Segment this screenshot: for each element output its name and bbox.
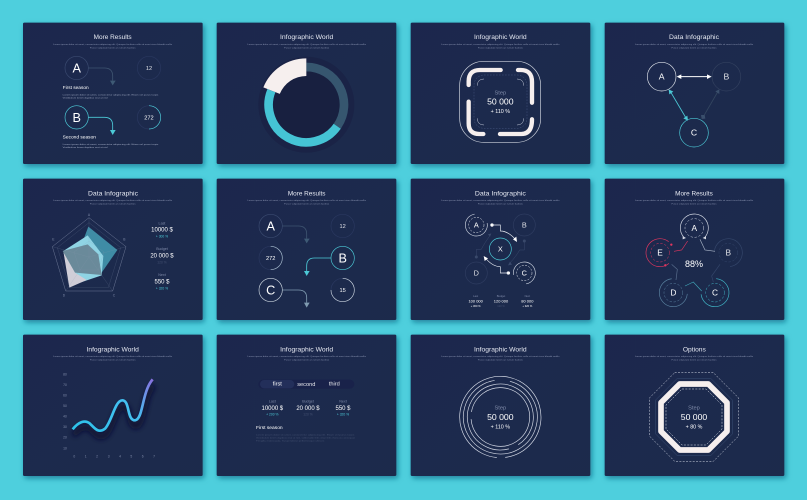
heading: Options — [683, 346, 706, 353]
heading: Infographic World — [474, 34, 527, 41]
heading: Infographic World — [86, 346, 139, 353]
node E — [640, 233, 680, 272]
value 272: 272 — [144, 115, 154, 121]
node X: X — [498, 245, 503, 254]
radar chart: B — [123, 238, 126, 242]
radar chart: A — [88, 213, 91, 217]
intro text: Fusce vulputate lorem an rutrum facilisis — [284, 46, 329, 49]
node A — [65, 56, 88, 80]
intro text: Fusce vulputate lorem an rutrum facilisis — [478, 358, 523, 361]
stat: Next: + 320 % — [522, 304, 533, 308]
intro text: Lorem ipsum dolor sit amet, consectetur adipiscing elit. Quisque facilisis nulla sit amet risus blandit mollis — [441, 355, 559, 358]
y axis labels: 70 — [63, 383, 67, 387]
value 12 — [331, 214, 354, 238]
x axis labels: 4 — [119, 455, 121, 459]
heading: Data Infographic — [475, 190, 526, 197]
y axis labels — [63, 373, 67, 450]
value 12 — [137, 56, 161, 80]
node C — [259, 278, 282, 302]
second season text — [63, 135, 158, 149]
panel: triangle ABC network — [605, 23, 784, 164]
gauge values — [681, 406, 707, 430]
node B: B — [72, 111, 81, 125]
node B — [65, 106, 88, 129]
radar chart — [52, 213, 126, 298]
panel: rounded square gauge — [411, 23, 590, 164]
node B — [513, 214, 535, 236]
heading: More Results — [675, 190, 713, 197]
first season text — [63, 85, 158, 100]
stat: Last: Last — [473, 294, 478, 298]
stat: Next: 550 $ — [336, 406, 351, 412]
stat: Budget: 20 000 $ — [150, 253, 174, 259]
intro text — [441, 355, 559, 361]
stat: Next: 80 000 — [521, 299, 534, 304]
first season text: Vestibulum lorem dapibus erat at nisl — [63, 97, 108, 100]
stat: Last: 100 000 — [468, 299, 484, 304]
intro text — [53, 355, 172, 361]
stat: Budget — [494, 294, 509, 308]
node C — [680, 118, 708, 147]
intro text — [53, 199, 172, 205]
value 272: 272 — [266, 256, 275, 262]
first season text: Vestibulum lorem dapibus erat at nisl, sollicitudin felis vitae felis rhoncus consequat — [256, 436, 355, 439]
node A: A — [659, 72, 665, 82]
first season text — [256, 425, 355, 443]
heading: More Results — [288, 190, 325, 197]
tabs: third — [329, 382, 340, 388]
arrow C-B — [701, 89, 719, 119]
gauge values: Step — [495, 406, 506, 412]
arrow A-B — [677, 74, 712, 79]
node X — [489, 238, 511, 260]
value 272 — [137, 106, 161, 129]
panel: concentric rings — [411, 335, 590, 476]
gauge values: + 110 % — [491, 424, 510, 430]
gauge values — [487, 90, 514, 115]
intro text: Lorem ipsum dolor sit amet, consectetur adipiscing elit. Quisque facilisis nulla sit amet risus blandit mollis — [247, 355, 366, 358]
stat: Budget — [150, 247, 174, 264]
stat: Last — [262, 400, 284, 417]
gauge values — [487, 406, 514, 430]
gauge values: 50 000 — [487, 97, 514, 107]
arrow from A — [282, 226, 310, 243]
stat: Next: Next — [525, 294, 530, 298]
first season text: Lorem ipsum dolor sit amet, consectetur adipiscing elit. Etiam vel purus turpis — [63, 94, 158, 97]
y axis labels: 10 — [63, 446, 67, 450]
stat: Last: + 300 % — [471, 304, 481, 308]
intro text: Fusce vulputate lorem an rutrum facilisis — [478, 202, 523, 205]
panel: X hub diagram — [411, 179, 590, 320]
heading: Data Infographic — [669, 34, 719, 41]
node A — [647, 62, 676, 91]
arrow from B — [304, 258, 331, 276]
intro text: Fusce vulputate lorem an rutrum facilisis — [671, 46, 716, 49]
intro text — [441, 199, 559, 205]
stat: Budget: 20 000 $ — [296, 406, 320, 412]
x axis labels: 2 — [96, 455, 98, 459]
x axis labels: 3 — [108, 455, 110, 459]
node C: C — [691, 128, 697, 138]
intro text: Fusce vulputate lorem an rutrum facilisis — [478, 46, 523, 49]
panel: line chart — [23, 335, 203, 476]
tabs: first — [273, 382, 282, 388]
gauge values: 50 000 — [487, 412, 514, 422]
value 15: 15 — [340, 288, 346, 294]
tabs — [258, 380, 354, 389]
heading: More Results — [94, 34, 132, 41]
gauge — [460, 61, 541, 142]
stat: Budget: 120 000 — [494, 299, 509, 304]
second season text: Second season — [63, 135, 96, 140]
stat: Next: Next — [158, 273, 166, 277]
stat: Last: 10000 $ — [262, 406, 284, 412]
gauge values: 50 000 — [681, 412, 707, 422]
intro text: Lorem ipsum dolor sit amet, consectetur adipiscing elit. Quisque facilisis nulla sit amet risus blandit mollis — [53, 43, 172, 46]
y axis labels: 60 — [63, 394, 67, 398]
value 12: 12 — [146, 66, 152, 72]
x axis labels: 6 — [142, 455, 144, 459]
stat: Last — [468, 294, 484, 308]
stat: Last: + 200 % — [266, 413, 279, 417]
node A — [675, 208, 714, 248]
stat: Last: + 300 % — [156, 234, 168, 238]
intro text — [247, 355, 366, 361]
white arrow top — [490, 223, 517, 242]
stat: Budget: Budget — [302, 400, 314, 404]
donut chart — [258, 57, 354, 153]
value 15 — [331, 278, 354, 302]
intro text: Fusce vulputate lorem an rutrum facilisis — [284, 358, 329, 361]
intro text: Fusce vulputate lorem an rutrum facilisis — [671, 202, 716, 205]
heading: Infographic World — [280, 346, 334, 353]
panel: options octagon — [605, 335, 784, 476]
value 272 — [259, 246, 282, 270]
intro text — [441, 43, 559, 49]
node A — [259, 214, 282, 238]
white arrow bottom — [484, 256, 510, 275]
node C: C — [266, 284, 275, 298]
second season text: Vestibulum lorem dapibus erat at nisl — [63, 146, 108, 149]
percent value: 88% — [685, 259, 703, 269]
intro text: Fusce vulputate lorem an rutrum facilisis — [671, 358, 716, 361]
first season text: First season — [256, 425, 283, 430]
x axis labels: 0 — [73, 455, 75, 459]
node A: A — [692, 223, 698, 233]
node C — [700, 277, 730, 308]
stat: Next: Next — [339, 400, 347, 404]
intro text — [247, 43, 366, 49]
heading: Infographic World — [280, 34, 334, 41]
intro text: Fusce vulputate lorem an rutrum facilisis — [90, 358, 135, 361]
radar chart: E — [52, 238, 55, 242]
node A: A — [72, 62, 81, 76]
radar chart: C — [113, 294, 116, 298]
panel: More Results A B seasons — [23, 23, 203, 164]
stat: Budget: 120 % — [157, 260, 167, 264]
first season text: First season — [63, 85, 89, 90]
intro text: Fusce vulputate lorem an rutrum facilisis — [284, 202, 329, 205]
y axis labels: 40 — [63, 415, 67, 419]
radar chart: D — [63, 294, 66, 298]
node D: D — [670, 288, 676, 298]
node A: A — [266, 220, 275, 234]
y axis labels: 20 — [63, 436, 67, 440]
node D: D — [474, 269, 479, 278]
node C — [512, 260, 537, 286]
connectors — [672, 239, 720, 291]
intro text: Lorem ipsum dolor sit amet, consectetur adipiscing elit. Quisque facilisis nulla sit amet risus blandit mollis — [635, 355, 753, 358]
gauge values: Step — [495, 90, 506, 96]
intro text: Lorem ipsum dolor sit amet, consectetur adipiscing elit. Quisque facilisis nulla sit amet risus blandit mollis — [635, 43, 753, 46]
y axis labels: 50 — [63, 404, 67, 408]
x axis labels: 7 — [153, 455, 155, 459]
stat: Budget: 120 % — [303, 413, 313, 417]
node B: B — [522, 221, 527, 230]
arrow from B — [88, 117, 116, 135]
intro text: Lorem ipsum dolor sit amet, consectetur adipiscing elit. Quisque facilisis nulla sit amet risus blandit mollis — [441, 199, 559, 202]
gauge values: + 80 % — [686, 424, 703, 430]
stat: Next: + 320 % — [337, 413, 349, 417]
panel: tabs and stats — [217, 335, 396, 476]
intro text — [635, 355, 753, 361]
intro text — [635, 43, 753, 49]
intro text: Lorem ipsum dolor sit amet, consectetur adipiscing elit. Quisque facilisis nulla sit amet risus blandit mollis — [635, 199, 753, 202]
stat: Next: + 320 % — [156, 286, 168, 290]
node C: C — [712, 288, 718, 298]
stat: Next — [521, 294, 534, 308]
y axis labels: 80 — [63, 373, 67, 377]
intro text — [635, 199, 753, 205]
node B — [713, 237, 743, 268]
value 12: 12 — [340, 224, 346, 230]
x axis labels — [73, 455, 155, 459]
octagon gauge — [650, 373, 738, 461]
y axis labels: 30 — [63, 425, 67, 429]
heading: Infographic World — [474, 346, 527, 353]
dim connectors — [475, 233, 526, 265]
panel: donut chart — [217, 23, 396, 164]
intro text: Lorem ipsum dolor sit amet, consectetur adipiscing elit. Quisque facilisis nulla sit amet risus blandit mollis — [441, 43, 559, 46]
heading: Data Infographic — [88, 190, 138, 197]
stat: Budget — [296, 400, 320, 417]
node B: B — [726, 248, 732, 258]
stat: Next: 550 $ — [155, 279, 170, 285]
stat: Next — [155, 273, 170, 290]
node A: A — [474, 221, 479, 230]
intro text: Fusce vulputate lorem an rutrum facilisis — [90, 202, 135, 205]
stat: Last: 10000 $ — [151, 228, 173, 234]
intro text: Lorem ipsum dolor sit amet, consectetur adipiscing elit. Quisque facilisis nulla sit amet risus blandit mollis — [247, 43, 366, 46]
x axis labels: 5 — [130, 455, 132, 459]
first season text: Fringilla malesuada. Suspendisse pellentesque ultrices — [256, 440, 324, 443]
node B: B — [723, 72, 729, 82]
arrow from C — [282, 290, 310, 308]
first season text: Lorem ipsum dolor sit amet, consectetur adipiscing elit. Etiam vel purus turpis — [256, 433, 354, 436]
node D — [658, 277, 688, 308]
intro text: Fusce vulputate lorem an rutrum facilisis — [90, 46, 135, 49]
second season text: Lorem ipsum dolor sit amet, consectetur adipiscing elit. Etiam vel purus turpis — [63, 143, 158, 146]
tabs: second — [297, 382, 315, 388]
stat: Last: Last — [269, 400, 276, 404]
arrow from A — [88, 68, 116, 85]
node C: C — [522, 269, 528, 278]
gauge values: Step — [688, 406, 700, 412]
stat: Budget: Budget — [156, 247, 168, 251]
node D — [465, 262, 487, 284]
stat: Budget: 120 % — [497, 304, 505, 308]
gauge values: + 110 % — [491, 109, 510, 115]
rings — [455, 372, 546, 462]
node B: B — [338, 252, 347, 266]
x axis labels: 1 — [85, 455, 87, 459]
node A — [464, 212, 489, 238]
node B — [331, 246, 354, 270]
intro text: Lorem ipsum dolor sit amet, consectetur adipiscing elit. Quisque facilisis nulla sit amet risus blandit mollis — [53, 355, 172, 358]
panel: More Results six nodes — [217, 179, 396, 320]
stat: Last — [151, 221, 173, 238]
intro text — [247, 199, 366, 205]
intro text — [53, 43, 172, 49]
node B — [712, 62, 741, 91]
node E: E — [657, 248, 663, 258]
stat: Last: Last — [159, 221, 165, 225]
wave line — [73, 379, 154, 437]
panel: five node cycle 88% — [605, 179, 784, 320]
intro text: Lorem ipsum dolor sit amet, consectetur adipiscing elit. Quisque facilisis nulla sit amet risus blandit mollis — [53, 199, 172, 202]
stat: Budget: Budget — [497, 294, 505, 298]
stat: Next — [336, 400, 351, 417]
arrow A-C — [669, 89, 688, 121]
panel: radar chart and stats — [23, 179, 203, 320]
intro text: Lorem ipsum dolor sit amet, consectetur adipiscing elit. Quisque facilisis nulla sit amet risus blandit mollis — [247, 199, 366, 202]
